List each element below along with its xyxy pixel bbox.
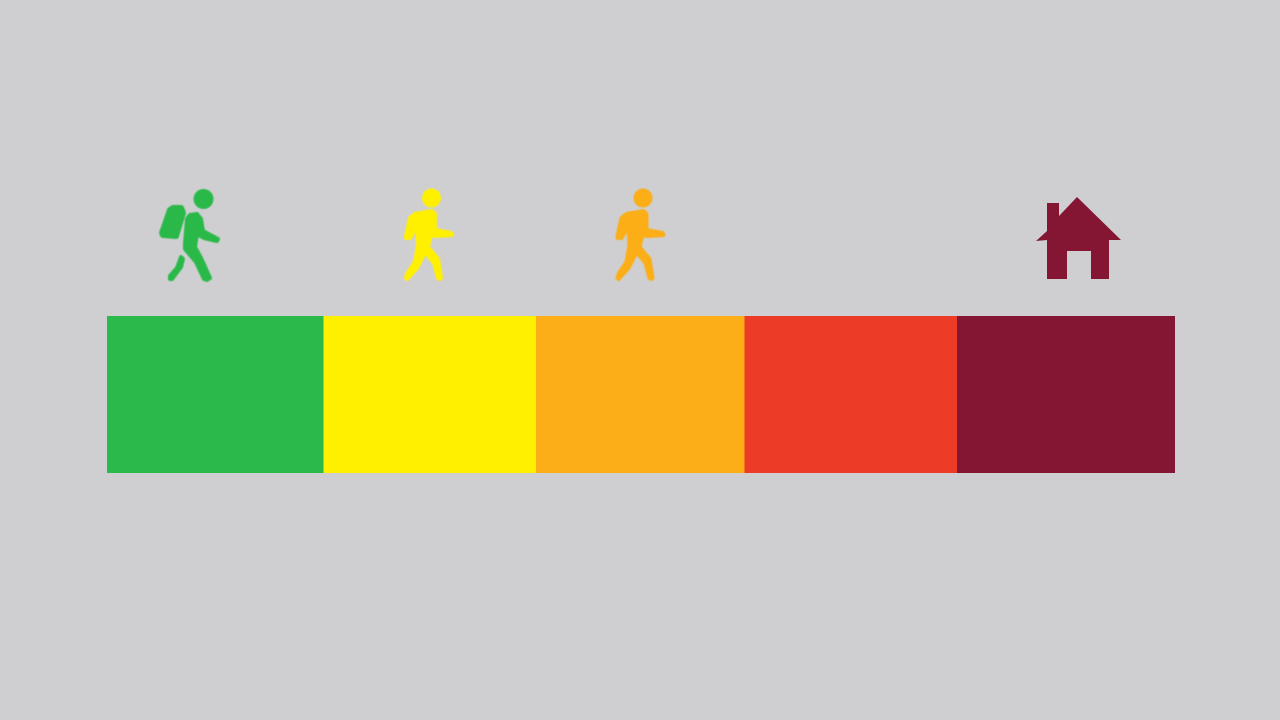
icon: orange walker xyxy=(618,188,664,279)
segment: yellow xyxy=(324,316,536,473)
segment: orange xyxy=(536,316,745,473)
segment: red xyxy=(744,316,958,473)
segment: green xyxy=(107,316,324,473)
segment: maroon xyxy=(957,316,1175,473)
icon: maroon house xyxy=(1036,197,1121,279)
colour scale bar xyxy=(107,316,1175,473)
icon: green hiker with backpack xyxy=(162,189,218,280)
icon: yellow walker xyxy=(406,188,452,279)
